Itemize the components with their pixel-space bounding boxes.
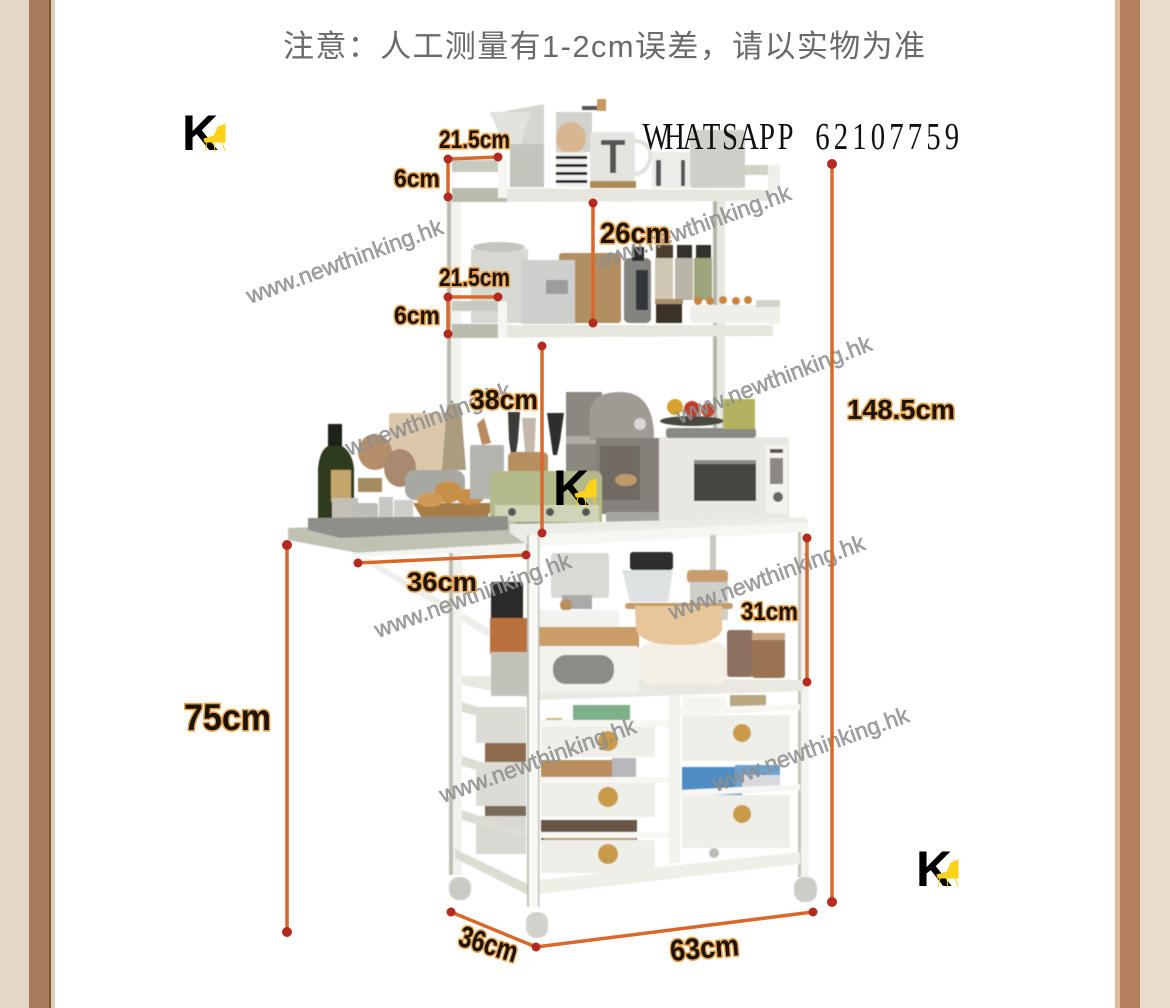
label: middle bracket height: 6cm — [394, 302, 440, 330]
illustration: kitchen rack — [288, 99, 817, 938]
logo: top left: K — [182, 105, 218, 161]
label: lower shelf gap: 31cm — [741, 598, 798, 626]
microwave with fruit — [659, 399, 789, 521]
toaster — [490, 471, 602, 528]
counter items — [318, 403, 564, 523]
label: wing height: 75cm — [184, 697, 271, 738]
measure line: 31cm — [802, 534, 812, 686]
measure lines: top shelf bracket — [444, 152, 502, 202]
centre divider — [669, 695, 680, 863]
label: total height: 148.5cm — [847, 394, 955, 425]
label: base width: 63cm — [669, 929, 740, 968]
label: wing depth: 36cm — [407, 567, 477, 597]
right drawer column — [680, 704, 800, 858]
label: top bracket height: 6cm — [394, 165, 440, 193]
watermarks: www.newthinking.hk — [590, 179, 795, 275]
lower shelf appliances — [490, 552, 785, 696]
watermarks — [242, 179, 913, 808]
label: shelf gap 26cm: 26cm — [600, 218, 670, 250]
drawer contents — [485, 695, 780, 840]
watermarks: www.newthinking.hk — [672, 330, 876, 429]
watermarks: www.newthinking.hk — [242, 213, 447, 309]
contact text: WHATSAPP 62107759 — [642, 116, 959, 158]
lower shelf — [462, 676, 809, 700]
measure lines: middle shelf bracket — [444, 292, 502, 338]
measure line: 38cm — [538, 342, 546, 538]
measure line: wing height 75cm — [282, 540, 292, 937]
coffee machine — [566, 392, 668, 524]
label: top bracket width: 21.5cm — [439, 126, 510, 154]
label: middle bracket width: 21.5cm — [439, 264, 510, 292]
label: base depth: 36cm — [455, 920, 522, 969]
heading note: 注意：人工测量有1-2cm误差，请以实物为准 — [283, 29, 925, 64]
watermarks: www.newthinking.hk — [370, 547, 575, 643]
watermarks: www.newthinking.hk — [708, 701, 913, 797]
measure line: wing depth 36cm — [354, 550, 530, 568]
logo: bottom right: K — [916, 841, 952, 897]
bottom frame and front post — [455, 535, 800, 907]
wheels — [449, 877, 817, 938]
folding wing and counter — [288, 516, 808, 556]
top shelf items — [490, 99, 745, 188]
rear and right posts — [449, 532, 809, 877]
logo: centre: K — [553, 460, 589, 516]
watermarks: www.newthinking.hk — [664, 529, 869, 625]
middle shelf items — [471, 242, 768, 324]
top shelf — [452, 160, 780, 202]
fold support arm — [358, 558, 526, 658]
measure line: 26cm — [588, 198, 598, 328]
left drawer column — [462, 702, 669, 873]
middle shelf — [452, 300, 780, 338]
measure lines: base depth and width — [446, 908, 818, 952]
measure line: total height 148.5cm — [827, 159, 837, 907]
watermarks: w.newthinking.hk — [341, 377, 515, 461]
label: shelf gap 38cm: 38cm — [470, 384, 538, 415]
rack uprights upper — [447, 198, 725, 528]
watermarks: www.newthinking.hk — [435, 712, 640, 808]
